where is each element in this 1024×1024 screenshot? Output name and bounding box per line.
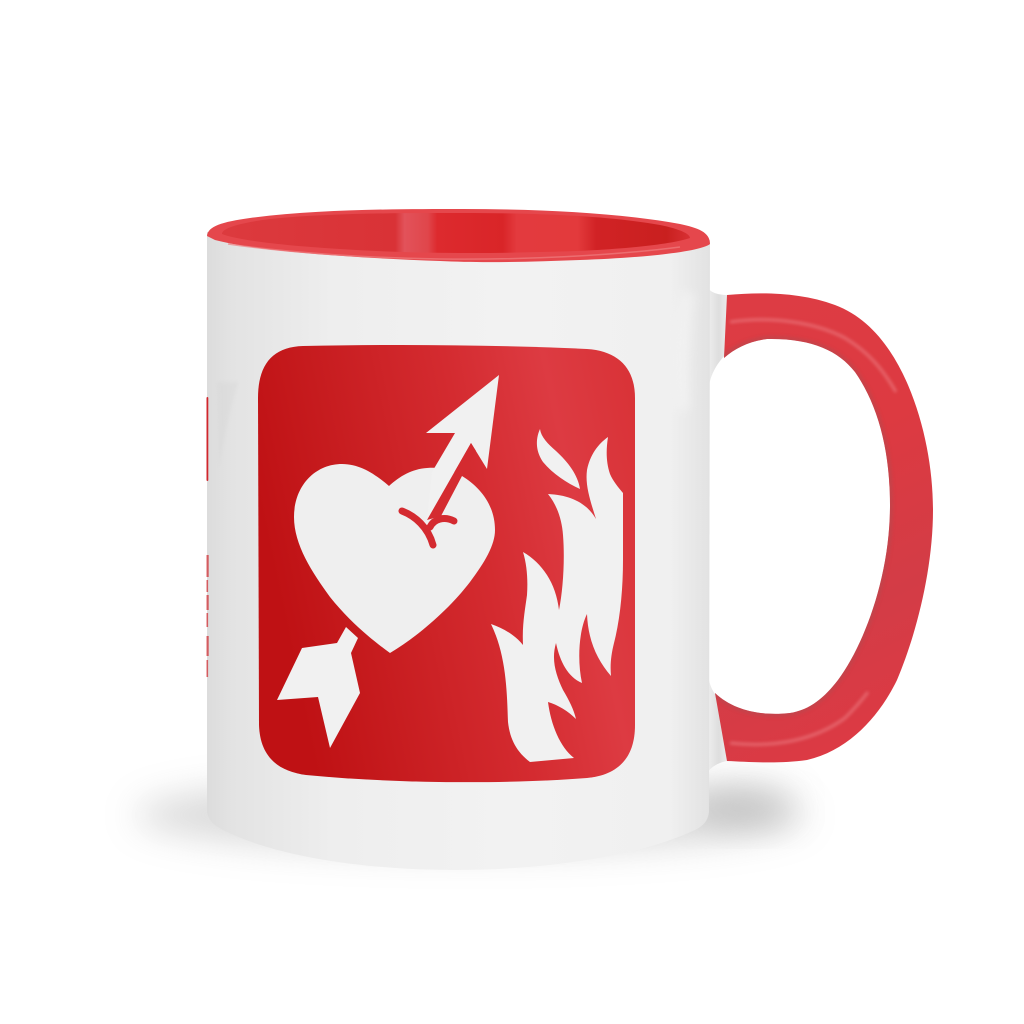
arrow shaft inside the heart: [427, 443, 476, 520]
handle loop: [715, 293, 933, 762]
mug body: [207, 232, 710, 870]
large flame: [491, 437, 623, 762]
mug product illustration: [136, 209, 933, 870]
wrapped panel sliver: [206, 397, 208, 481]
wrapped text slivers: [206, 555, 209, 677]
left edge wrap of the back-side print: [206, 397, 209, 677]
icon: flames: [491, 429, 623, 762]
glaze reflection on the mug left side: [217, 382, 238, 470]
floor shadow: [135, 779, 805, 851]
red rounded square: [258, 345, 635, 782]
printed icon panel: [258, 345, 635, 782]
arrow barb lines: [402, 511, 454, 545]
icon: heart pierced by arrow: [277, 375, 499, 748]
heart: [294, 464, 495, 653]
inner mug opening: [222, 213, 690, 253]
handle shading: [715, 320, 896, 744]
glaze reflection on the mug right side: [676, 290, 696, 410]
arrow head and shaft: [426, 375, 499, 520]
handle: [705, 285, 933, 775]
handle connectors: [705, 285, 728, 775]
rim lip highlight: [228, 244, 680, 259]
arrow fletching: [277, 627, 360, 748]
outer rim: [207, 209, 710, 262]
small flame: [537, 429, 580, 489]
rim: [207, 209, 710, 262]
